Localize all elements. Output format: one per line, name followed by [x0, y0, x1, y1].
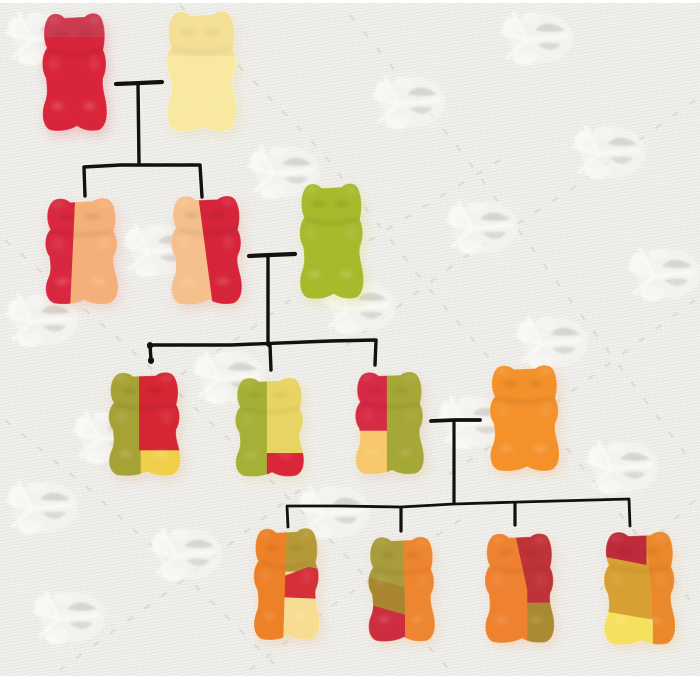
line: first generation cross [84, 82, 202, 197]
pedigree lines [84, 82, 630, 531]
line: third generation cross [287, 420, 630, 531]
bear: red, olive, yellow and orange offspring [597, 526, 683, 650]
bear: olive, red and yellow offspring [108, 372, 188, 484]
bear: green partner [294, 177, 370, 305]
bear: peach and red offspring [165, 190, 249, 310]
bear: olive, brown, red and orange offspring [362, 531, 442, 647]
bear: red, yellow and olive offspring [354, 372, 431, 482]
bear: orange, olive, red and yellow offspring [247, 522, 327, 646]
bear: olive, yellow and red offspring [234, 378, 311, 484]
bear: red and peach offspring [45, 198, 125, 312]
bear: yellow parent [166, 11, 244, 140]
bear: orange partner [483, 360, 567, 476]
bear: red parent [36, 7, 114, 137]
bear: orange, red and olive offspring [484, 534, 562, 651]
line: second generation cross [150, 254, 376, 370]
